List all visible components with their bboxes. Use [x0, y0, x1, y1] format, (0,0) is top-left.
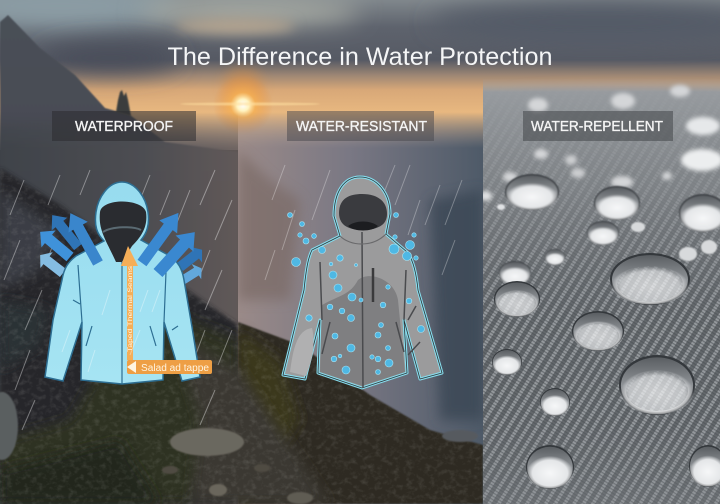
wet patches [320, 276, 405, 386]
weave seen through near droplets [498, 266, 688, 411]
callout: sealed tape [127, 360, 212, 374]
panel: water-resistant scene [238, 114, 483, 504]
label: water-resistant [287, 111, 434, 141]
background: sunset sky [0, 0, 720, 150]
seams, zipper and pocket [320, 232, 420, 388]
panel: waterproof scene [0, 0, 238, 504]
icon: water-resistant jacket with droplets [283, 177, 442, 388]
arrows: deflected rain, front [61, 206, 204, 281]
panel: water-repellent fabric [480, 78, 720, 504]
droplets: near, sharp [494, 281, 540, 317]
arrow: seam callout: Taped Thermal Seams [128, 266, 134, 352]
droplets: mid [497, 174, 720, 285]
jacket body [45, 182, 200, 384]
label: waterproof [52, 111, 196, 141]
arrows: deflected rain, behind jacket [33, 209, 208, 288]
droplets: far, blurred [480, 85, 720, 201]
arrow: seam callout [121, 246, 138, 360]
label: water-repellent: WATER-REPELLENT [531, 119, 663, 135]
rocky trail [0, 170, 483, 504]
title: The Difference in Water Protection [168, 43, 552, 71]
water drops [288, 212, 424, 374]
jacket seams [73, 262, 178, 384]
label: water-repellent [523, 111, 673, 141]
icon: waterproof jacket with deflecting arrows [33, 182, 212, 384]
hood opening [339, 194, 387, 230]
rain streaks [4, 170, 232, 430]
hood opening [100, 202, 146, 262]
label: waterproof: WATERPROOF [75, 119, 173, 135]
callout: sealed tape: Salad ad tappe [141, 363, 209, 374]
label: water-resistant: WATER-RESISTANT [296, 119, 427, 135]
jacket body [283, 177, 442, 388]
rain over jacket [62, 290, 160, 372]
sun [180, 68, 320, 135]
